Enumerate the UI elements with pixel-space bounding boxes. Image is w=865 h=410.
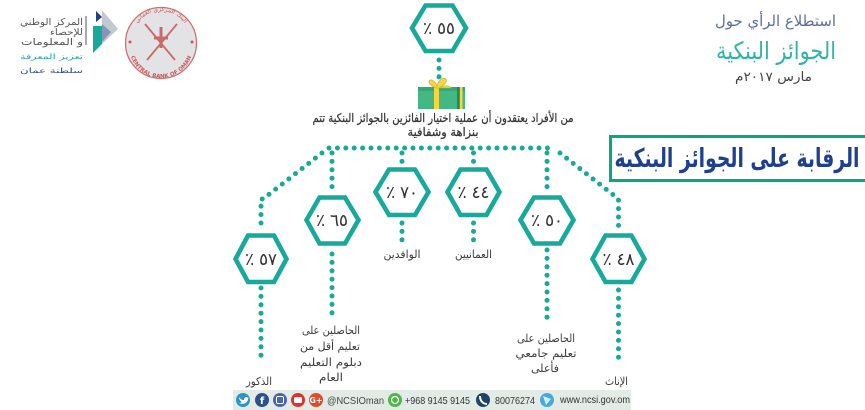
NCSI name text	[20, 17, 83, 75]
logo: Central Bank of Oman seal: البنك المركزي العماني	[136, 6, 188, 23]
stat: university and above 50%: ٥٠ ٪	[531, 211, 563, 231]
panel: section title	[610, 136, 865, 180]
icon: instagram	[273, 393, 287, 407]
stat: females 48%: ٤٨ ٪	[602, 250, 634, 270]
icon: google plus: G+	[309, 396, 323, 405]
stat: expatriates 70%: الوافدين	[384, 248, 420, 261]
survey subtitle: استطلاع الرأي حول	[715, 11, 836, 31]
hexagon: 55%: ٥٥ ٪	[423, 19, 455, 39]
whatsapp number: +968 9145 9145	[405, 395, 470, 407]
NCSI name text: و المعلومات	[21, 37, 83, 48]
stat: university and above 50%: الحاصلين على	[517, 332, 575, 345]
stat: university and above 50%	[516, 198, 576, 375]
logo: Central Bank of Oman seal	[124, 6, 198, 80]
stat: university and above 50%: تعليم جامعي	[516, 347, 576, 360]
main finding text	[312, 110, 574, 140]
icon: twitter	[236, 393, 250, 407]
icon: gift box	[418, 78, 465, 109]
stat: below general diploma 65%: دبلوم التعليم	[300, 356, 362, 369]
header: survey title	[715, 11, 836, 85]
stat: below general diploma 65%: تعليم أقل من	[300, 339, 360, 353]
stat: males 57%	[236, 236, 286, 388]
date: مارس ٢٠١٧م	[735, 70, 812, 85]
logo: NCSI	[20, 10, 118, 75]
footer: contact strip	[233, 390, 631, 410]
stat: expatriates 70%: ٧٠ ٪	[386, 183, 418, 203]
stat: Omanis 44%: العمانيين	[455, 248, 492, 261]
icon: facebook: f	[260, 396, 265, 407]
NCSI name text: تعزيز المعرفة	[20, 53, 83, 61]
stat: below general diploma 65%	[300, 198, 362, 384]
survey name: الجوائز البنكية	[716, 37, 836, 65]
logo: Central Bank of Oman seal: CENTRAL BANK OF OMAN	[131, 56, 192, 78]
icon: phone	[476, 393, 490, 407]
stat: Omanis 44%: ٤٤ ٪	[458, 183, 490, 203]
stat: males 57%: ٥٧ ٪	[245, 250, 277, 270]
stat: females 48%	[592, 236, 644, 388]
NCSI symbol	[86, 10, 118, 53]
icon: youtube	[291, 393, 305, 407]
main finding text: بنزاهة وشفافية	[408, 125, 478, 140]
stat: university and above 50%: فأعلى	[531, 360, 559, 375]
hexagon: 55%	[412, 6, 466, 51]
icon: whatsapp	[388, 393, 402, 407]
phone number: 80076274	[495, 395, 535, 407]
icon: globe	[540, 393, 554, 407]
icon: facebook	[255, 393, 269, 407]
main finding text: من الأفراد يعتقدون أن عملية اختيار الفائزين بالجوائز البنكية تتم	[312, 110, 574, 126]
NCSI name text: سلطنة عمان	[20, 67, 83, 75]
stat: Omanis 44%	[448, 170, 500, 261]
stat: females 48%: الإناث	[605, 375, 628, 388]
stat: expatriates 70%	[376, 170, 428, 261]
stat: males 57%: الذكور	[245, 375, 272, 388]
website: www.ncsi.gov.om	[559, 394, 630, 406]
stat: below general diploma 65%: العام	[319, 371, 343, 384]
icon: google plus	[309, 393, 323, 407]
stat: below general diploma 65%: الحاصلين على	[302, 324, 360, 337]
connector dots	[261, 60, 618, 358]
social handle: @NCSIOman	[327, 395, 384, 407]
stat: below general diploma 65%: ٦٥ ٪	[316, 211, 348, 231]
NCSI name text: للإحصاء	[50, 28, 83, 38]
NCSI name text: المركز الوطني	[20, 17, 83, 28]
